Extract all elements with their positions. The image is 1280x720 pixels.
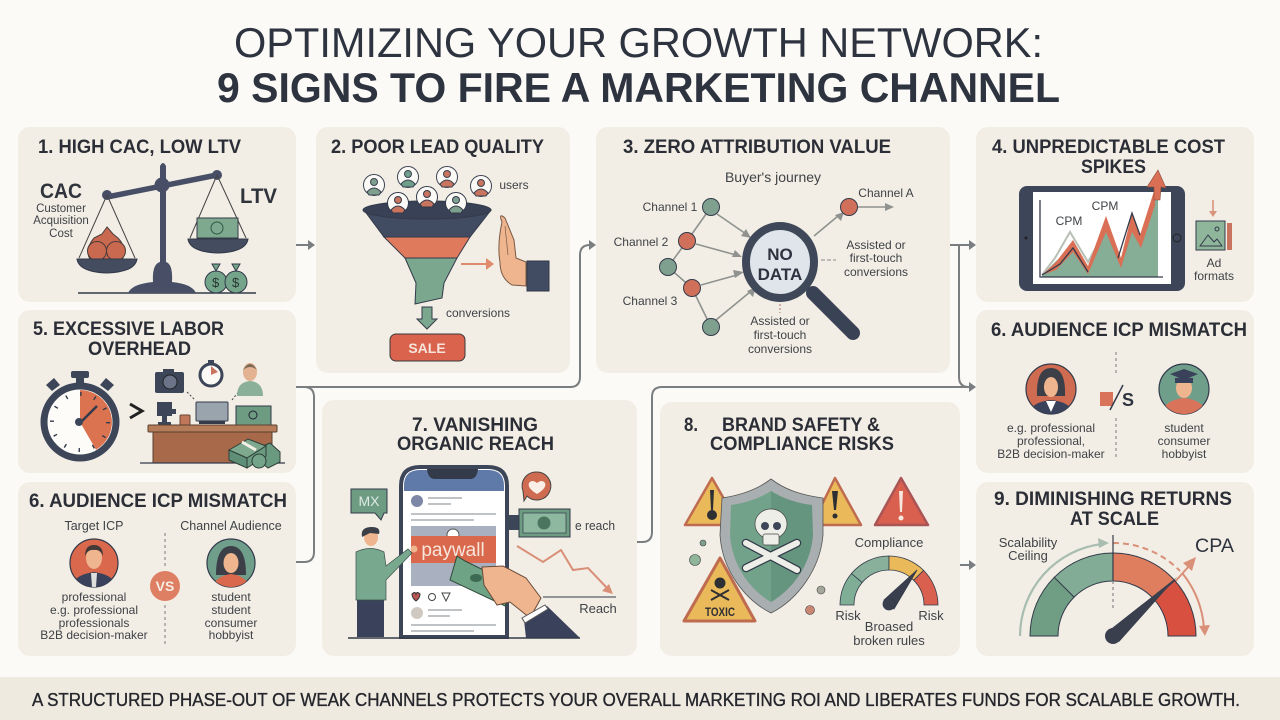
column: target ICP — [40, 519, 148, 642]
title: OPTIMIZING YOUR GROWTH NETWORK: — [234, 19, 1043, 66]
column: professional — [997, 364, 1105, 461]
panel: 7 vanishing organic reach — [322, 400, 637, 656]
heading 1: 1. HIGH CAC, LOW LTV — [38, 137, 241, 158]
icon: heart bubble — [522, 472, 551, 501]
heading 5: 5. EXCESSIVE LABOR — [33, 319, 224, 340]
bottom note: Assisted or — [750, 314, 810, 328]
icon: balance scale — [77, 163, 256, 293]
heading 7 — [397, 415, 554, 455]
vs mark — [1100, 352, 1134, 458]
icon: speech bubble — [351, 489, 387, 520]
icon: magnifier no data: DATA — [758, 265, 802, 284]
heading 6: 6. AUDIENCE ICP MISMATCH — [29, 491, 287, 512]
footer banner — [0, 677, 1280, 720]
icon: phone with paywall: paywall — [421, 540, 485, 561]
CAC label — [33, 180, 89, 240]
channel labels: Channel A — [858, 186, 914, 200]
heading 8: 8. — [684, 415, 698, 436]
column: channel audience: consumer — [205, 616, 257, 630]
declining reach chart: Reach — [579, 601, 617, 616]
title — [217, 19, 1060, 111]
panel: 6 audience ICP mismatch right — [976, 310, 1254, 473]
heading 8 — [684, 415, 894, 455]
column: student: hobbyist — [1162, 447, 1207, 461]
icon: marketer figure — [356, 527, 418, 637]
sale button — [390, 334, 465, 361]
icon: cash bill — [508, 509, 570, 537]
icon: warning triangle left — [685, 478, 739, 525]
icon: rejection arrow — [461, 258, 494, 270]
subheading: Buyer's journey — [725, 169, 821, 185]
column: target ICP: e.g. professional — [50, 603, 138, 617]
bottom note: first-touch — [754, 328, 806, 342]
icon: shield with skull — [720, 479, 823, 613]
column: student — [1158, 364, 1210, 461]
decorative risk dots — [690, 540, 825, 614]
gauge labels: Broased — [865, 619, 913, 634]
scalability label: Scalability — [999, 535, 1058, 550]
heading 6 repeat: 6. AUDIENCE ICP MISMATCH — [991, 320, 1247, 341]
right note: conversions — [844, 265, 908, 279]
channel labels: Channel 3 — [623, 294, 678, 308]
CAC label: CAC — [40, 180, 82, 203]
panel: 1 high CAC low LTV — [18, 127, 296, 302]
gauge labels — [835, 608, 944, 648]
greater than sign — [130, 404, 142, 418]
icon: ad formats — [1194, 200, 1234, 283]
column: professional: e.g. professional — [1007, 421, 1095, 435]
column: professional: professional, — [1017, 434, 1085, 448]
heading 5 — [33, 319, 224, 360]
channel labels — [614, 186, 914, 308]
compliance gauge — [840, 556, 938, 610]
panel: 8 brand safety and compliance risks — [660, 402, 960, 656]
connector arrows between panels — [296, 240, 976, 570]
vs mark: S — [1122, 390, 1134, 410]
heading 4: SPIKES — [1081, 157, 1146, 178]
bottom note: conversions — [748, 342, 812, 356]
heading 7: ORGANIC REACH — [397, 434, 554, 455]
gauge labels: Risk — [918, 608, 944, 623]
heading 8: BRAND SAFETY & — [722, 415, 880, 436]
icon: toxic triangle: TOXIC — [705, 605, 735, 619]
CAC label: Cost — [49, 228, 74, 240]
tablet chart: CPM — [1092, 199, 1118, 213]
panel: 3 zero attribution value — [596, 127, 950, 373]
tablet chart — [1019, 170, 1185, 291]
icon: down arrow — [417, 307, 437, 329]
panel: 5 excessive labor overhead — [18, 310, 296, 473]
panel: 6 audience ICP mismatch left — [18, 482, 296, 656]
gauge labels: Risk — [835, 608, 861, 623]
vs badge — [150, 533, 180, 645]
declining reach chart — [517, 546, 617, 616]
column: channel audience: Channel Audience — [180, 519, 282, 533]
icon: speech bubble: MX — [358, 493, 380, 509]
heading 5: OVERHEAD — [88, 339, 191, 360]
icon: funnel — [363, 186, 491, 304]
column: target ICP: Target ICP — [64, 519, 124, 533]
footer banner: A STRUCTURED PHASE-OUT OF WEAK CHANNELS PROTECTS YOUR OVERALL MARKETING ROI AND LIBERATES FUNDS FOR SCALABLE GROWTH. — [32, 690, 1240, 710]
column: channel audience: student — [211, 590, 251, 604]
icon: magnifier no data — [746, 226, 853, 333]
column: student: consumer — [1158, 434, 1210, 448]
CPA label: CPA — [1195, 536, 1234, 557]
right note: Assisted or — [846, 238, 906, 252]
heading 4: 4. UNPREDICTABLE COST — [992, 137, 1225, 158]
heading 9: 9. DIMINISHING RETURNS — [994, 489, 1232, 510]
column: student: student — [1164, 421, 1204, 435]
bottom note — [748, 304, 812, 356]
scalability label — [999, 535, 1058, 563]
reach label top: e reach — [575, 518, 615, 533]
heading 2: 2. POOR LEAD QUALITY — [331, 137, 544, 158]
column: target ICP: B2B decision-maker — [40, 628, 148, 642]
right note: first-touch — [850, 251, 902, 265]
sale button: SALE — [408, 340, 446, 356]
LTV label: LTV — [240, 185, 277, 208]
icon: toxic triangle — [684, 558, 755, 621]
icon: ad formats: Ad — [1207, 256, 1221, 270]
heading 4 — [992, 137, 1225, 178]
icon: stop hand — [499, 216, 549, 291]
icon: stopwatch — [44, 371, 116, 458]
vs badge: VS — [156, 578, 174, 594]
title: 9 SIGNS TO FIRE A MARKETING CHANNEL — [217, 64, 1060, 111]
column: channel audience: student — [211, 603, 251, 617]
scalability label: Ceiling — [1008, 548, 1048, 563]
icon: balance scale: $ — [212, 275, 220, 290]
compliance label: Compliance — [855, 535, 923, 550]
column: channel audience — [180, 519, 282, 642]
panel: 4 unpredictable cost spikes — [976, 127, 1254, 302]
icon: magnifier no data: NO — [767, 245, 793, 264]
icon: red warning triangle — [875, 478, 928, 525]
users label: users — [499, 178, 529, 192]
heading 7: 7. VANISHING — [412, 415, 538, 436]
CAC label: Acquisition — [33, 215, 89, 227]
icon: phone with paywall — [401, 467, 507, 637]
gauge labels: broken rules — [853, 633, 925, 648]
icon: ad formats: formats — [1194, 269, 1234, 283]
column: professional: B2B decision-maker — [997, 447, 1105, 461]
icon: labor desk — [140, 360, 285, 468]
tablet chart: CPM — [1056, 214, 1082, 228]
heading 9: AT SCALE — [1070, 509, 1159, 530]
panel: 2 poor lead quality — [316, 127, 570, 373]
channel labels: Channel 2 — [614, 235, 669, 249]
icon: balance scale: $ — [232, 275, 240, 290]
channel labels: Channel 1 — [643, 200, 698, 214]
conversions label: conversions — [446, 306, 510, 320]
right note — [821, 238, 908, 279]
ground line — [348, 637, 580, 639]
column: target ICP: professional — [62, 590, 126, 604]
icon: warning triangle right — [812, 478, 861, 525]
heading 8: COMPLIANCE RISKS — [710, 434, 894, 455]
channel network — [660, 198, 894, 336]
icon: users — [364, 166, 492, 196]
column: channel audience: hobbyist — [209, 628, 254, 642]
panel: 9 diminishing returns at scale — [976, 482, 1254, 656]
heading 9 — [994, 489, 1232, 530]
icon: hand paying cash — [450, 556, 580, 638]
heading 3: 3. ZERO ATTRIBUTION VALUE — [623, 137, 891, 158]
CAC label: Customer — [36, 203, 86, 215]
column: target ICP: professionals — [59, 616, 129, 630]
CPA gauge — [1020, 535, 1210, 644]
